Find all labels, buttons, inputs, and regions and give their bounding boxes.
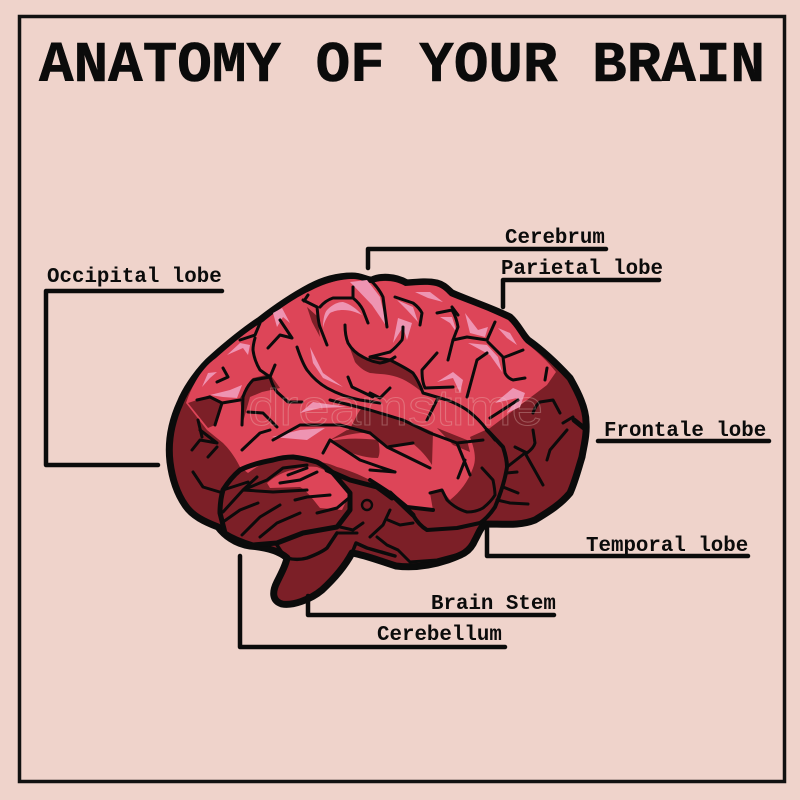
label: Parietal lobe (501, 258, 663, 307)
label: Cerebrum (368, 227, 606, 268)
label: Brain Stem: Brain Stem (431, 593, 556, 616)
label: Parietal lobe: Parietal lobe (501, 258, 663, 281)
leader line: Temporal lobe (487, 528, 748, 556)
brain base silhouette (169, 276, 586, 604)
label: Frontale lobe: Frontale lobe (604, 420, 766, 443)
watermark: dreamstime (248, 379, 543, 436)
label: Occipital lobe: Occipital lobe (47, 266, 222, 289)
label: Temporal lobe (487, 528, 748, 558)
title: ANATOMY OF YOUR BRAIN (39, 34, 765, 99)
pink highlights (202, 280, 525, 440)
leader line: Frontale lobe (598, 439, 769, 443)
brain illustration (169, 276, 586, 604)
light red cerebellum patch (267, 467, 350, 510)
label: Cerebellum: Cerebellum (377, 624, 502, 647)
label: Occipital lobe (46, 266, 222, 465)
leader line: Cerebellum (240, 556, 505, 647)
cerebellum outline (220, 457, 350, 545)
leader line: Occipital lobe (46, 291, 222, 465)
sulci black contour lines (192, 280, 584, 562)
label: Cerebrum: Cerebrum (505, 227, 605, 250)
leader line: Cerebrum (368, 249, 606, 268)
leader line: Parietal lobe (503, 280, 659, 307)
label: Brain Stem (308, 593, 556, 616)
brainstem fold (277, 533, 337, 560)
dark fold shadows (188, 307, 470, 465)
light red upper cortex (186, 279, 556, 510)
label: Cerebellum (240, 556, 505, 647)
label: Temporal lobe: Temporal lobe (586, 535, 748, 558)
frontal lobe black notch (574, 420, 584, 428)
cerebellum folia (223, 465, 307, 512)
thick temporal lobe contour (370, 430, 507, 530)
leader line: Brain Stem (308, 596, 554, 615)
